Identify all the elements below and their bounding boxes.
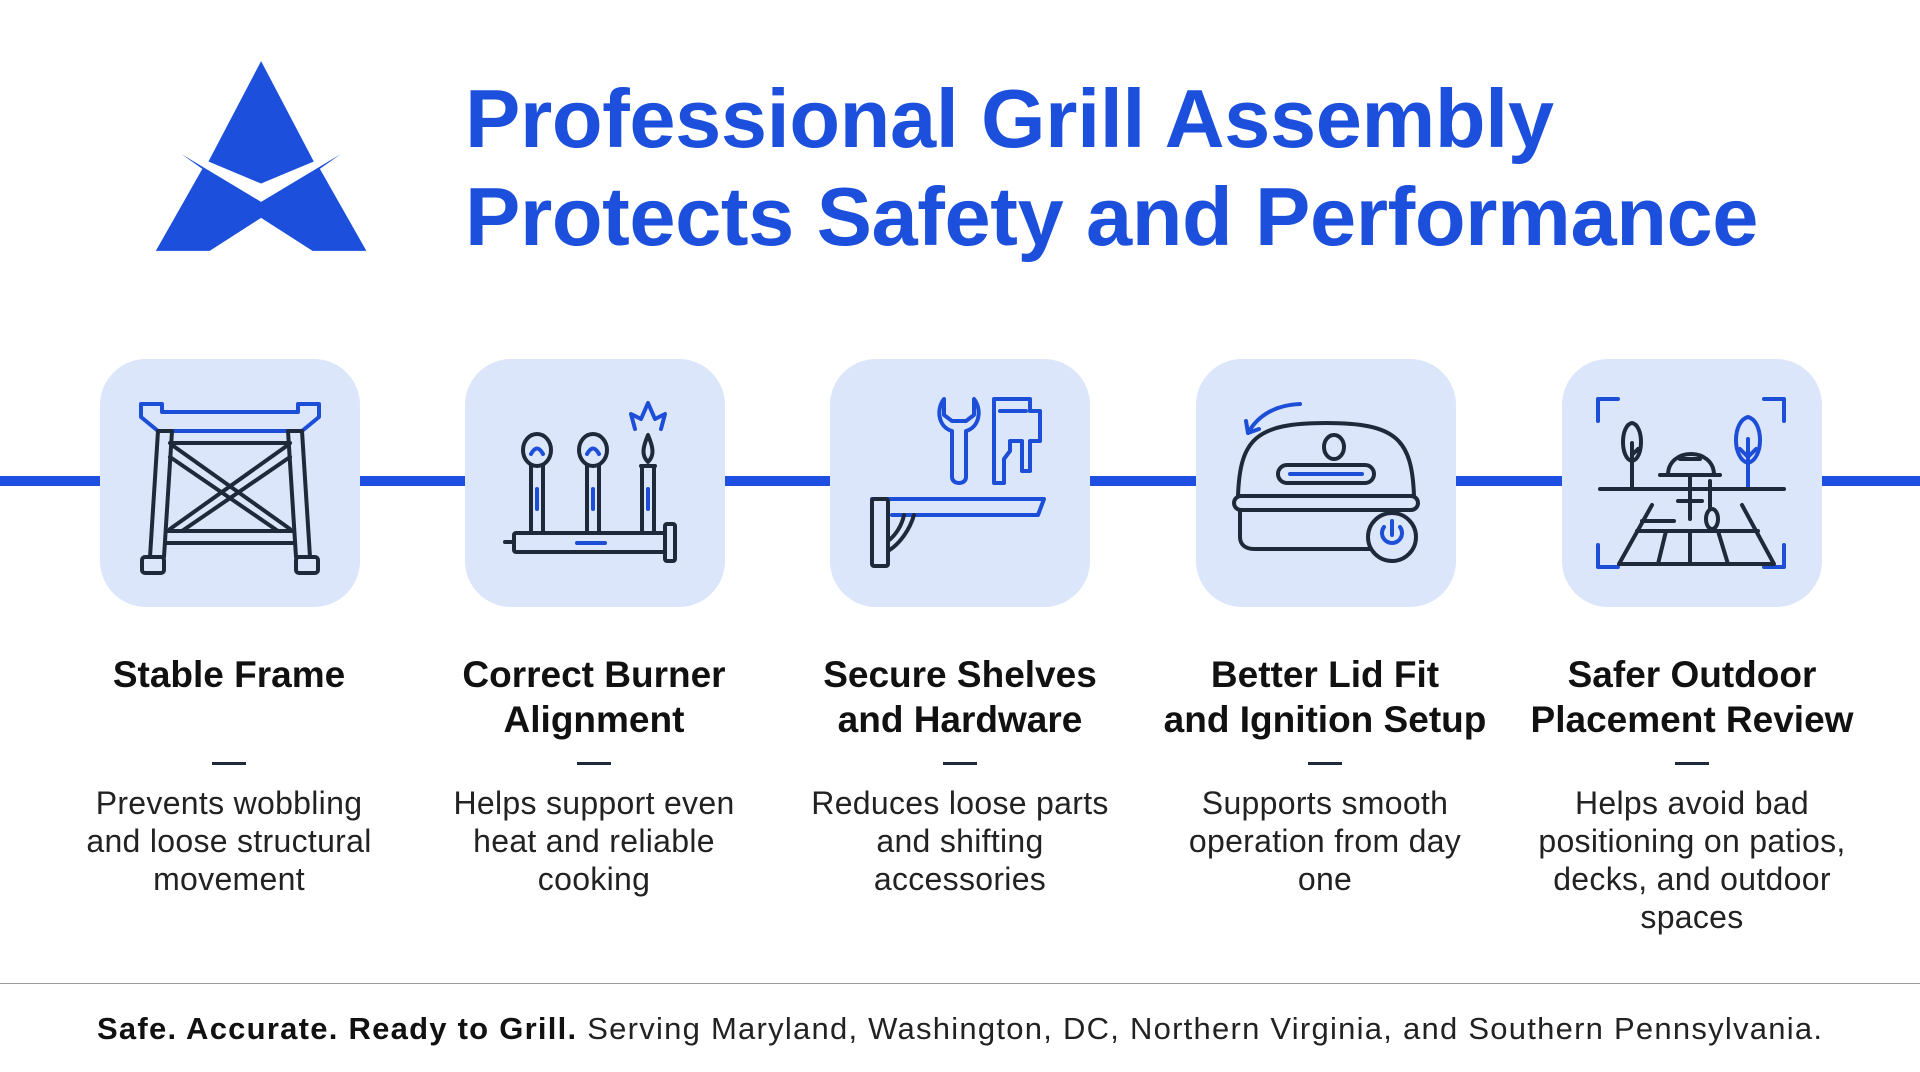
column 2 text: heat and reliable — [473, 823, 715, 859]
column 5 heading — [1531, 654, 1854, 740]
column 3 heading: and Hardware — [838, 699, 1082, 740]
column 5 text: spaces — [1640, 899, 1744, 935]
column 3 text: accessories — [874, 861, 1046, 897]
panel icon: outdoor placement — [1562, 359, 1822, 607]
column 2 heading: Correct Burner — [462, 654, 726, 695]
column 4 text — [1189, 785, 1461, 897]
column 4 heading — [1164, 654, 1486, 740]
title — [465, 72, 1758, 263]
column 4 text: operation from day — [1189, 823, 1461, 859]
column 2 text: cooking — [538, 861, 650, 897]
column 3 heading — [823, 654, 1097, 740]
column 2 text — [453, 785, 735, 897]
column 3 text — [811, 785, 1109, 897]
column 5 text — [1538, 785, 1846, 935]
column 3 heading: Secure Shelves — [823, 654, 1097, 695]
column 4 text: one — [1298, 861, 1352, 897]
logo — [156, 61, 366, 251]
column 5 text: decks, and outdoor — [1553, 861, 1831, 897]
column 1 text: movement — [153, 861, 305, 897]
column 5 heading: Placement Review — [1531, 699, 1853, 740]
column 3 text: Reduces loose parts — [811, 785, 1109, 821]
column 2 heading: Alignment — [504, 699, 684, 740]
panel icon: lid and ignition — [1196, 359, 1456, 607]
column 5 text: Helps avoid bad — [1575, 785, 1809, 821]
panel icon: burners — [465, 359, 725, 607]
column 3 text: and shifting — [876, 823, 1044, 859]
title: Professional Grill Assembly — [465, 72, 1554, 165]
panel icon: stable frame — [100, 359, 360, 607]
column 5 heading: Safer Outdoor — [1568, 654, 1816, 695]
column 1 text: and loose structural — [86, 823, 372, 859]
column 1 text — [86, 785, 372, 897]
column 4 text: Supports smooth — [1202, 785, 1448, 821]
footer: Safe. Accurate. Ready to Grill. Serving Maryland, Washington, DC, Northern Virginia, and Southern Pennsylvania. — [97, 1011, 1823, 1046]
column 2 heading — [462, 654, 726, 740]
column 1 heading: Stable Frame — [113, 654, 345, 695]
column 4 heading: Better Lid Fit — [1211, 654, 1439, 695]
column 5 text: positioning on patios, — [1538, 823, 1846, 859]
column 1 text: Prevents wobbling — [96, 785, 362, 821]
title: Protects Safety and Performance — [465, 170, 1758, 263]
panel icon: shelves hardware — [830, 359, 1090, 607]
column 2 text: Helps support even — [453, 785, 735, 821]
column 4 heading: and Ignition Setup — [1164, 699, 1486, 740]
